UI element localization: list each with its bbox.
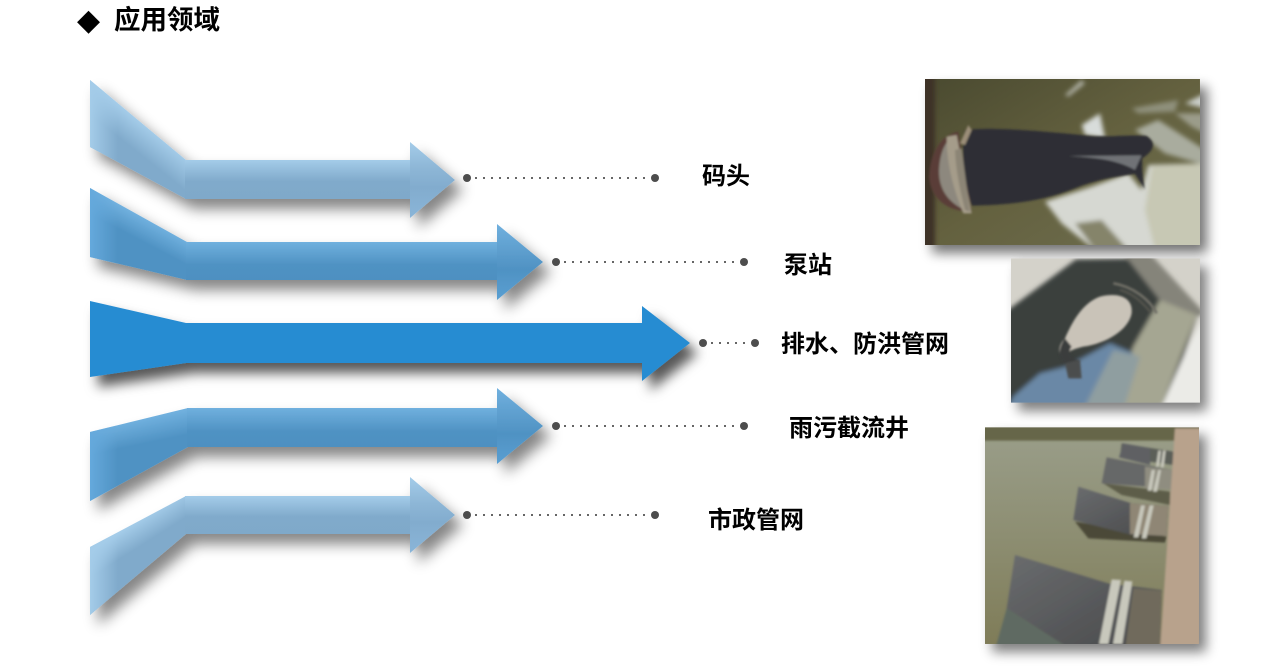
photo: pump station valve: [1003, 253, 1207, 411]
title: 应用领域: [77, 3, 220, 38]
label: 市政管网: 市政管网: [708, 507, 804, 534]
connector: 码头: [463, 174, 659, 182]
label: 泵站: 泵站: [784, 252, 832, 279]
arrow 5: 市政管网: [90, 477, 455, 615]
arrow 2: 泵站: [90, 188, 543, 300]
arrow 4: 雨污截流井: [90, 388, 543, 501]
connector: 雨污截流井: [552, 422, 748, 430]
label: 排水、防洪管网: 排水、防洪管网: [781, 331, 949, 358]
label: 码头: 码头: [702, 163, 750, 190]
connector: 市政管网: [463, 511, 659, 519]
photo: dock outlet valve: [918, 73, 1207, 253]
arrow 3: 排水、防洪管网: [90, 301, 690, 381]
label: 雨污截流井: 雨污截流井: [789, 415, 909, 442]
title: 应用领域: 应用领域: [114, 5, 220, 35]
title: 应用领域: ◆: [77, 3, 100, 38]
connector: 排水、防洪管网: [699, 339, 759, 347]
arrow 1: 码头: [90, 80, 455, 218]
photo: weir outlet valves: [978, 423, 1206, 652]
connector: 泵站: [552, 258, 748, 266]
